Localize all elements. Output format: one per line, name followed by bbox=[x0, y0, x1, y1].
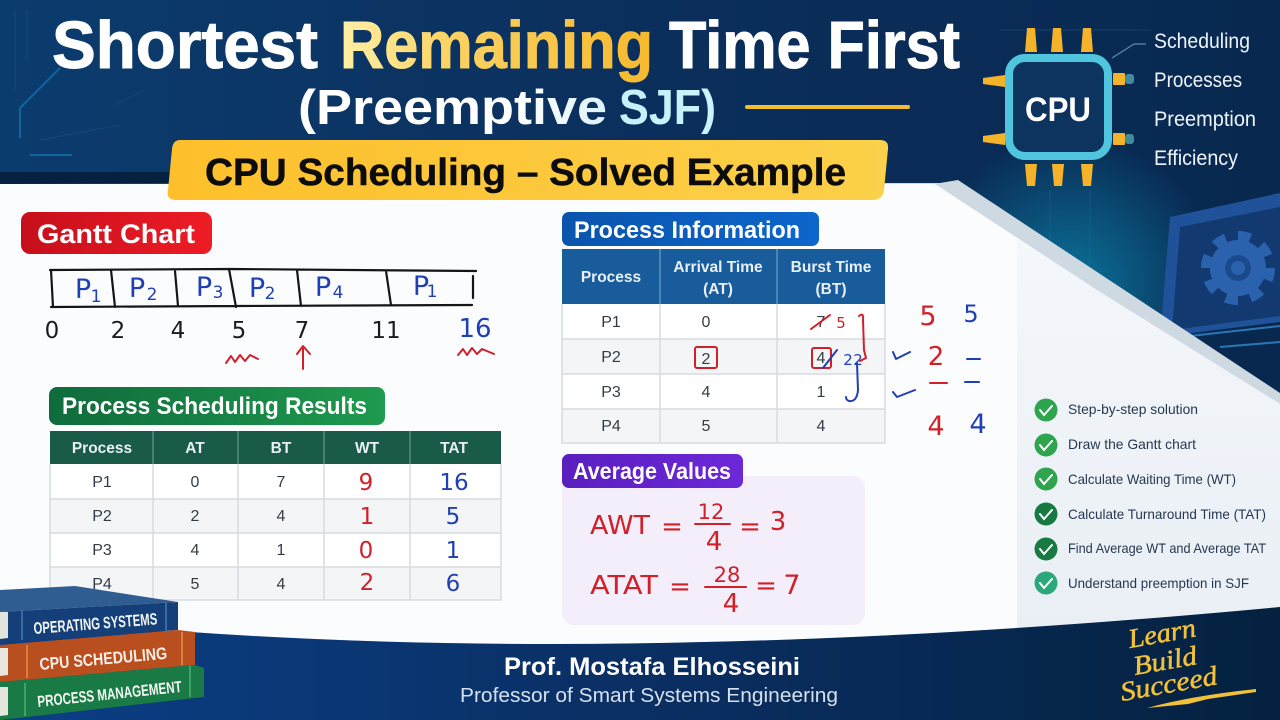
table: results: BT bbox=[271, 440, 292, 457]
formula: average waiting time: 4 bbox=[706, 527, 722, 557]
panel: Average Values bbox=[562, 454, 865, 625]
chart: hand-drawn Gantt bar: P bbox=[249, 273, 265, 304]
icon: CPU chip: CPU bbox=[1025, 91, 1091, 129]
table: process information bbox=[562, 249, 885, 443]
table: process information: P3 bbox=[601, 384, 621, 401]
chart: hand-drawn Gantt bar bbox=[45, 269, 494, 369]
motto: Learn Build Succeed: Learn bbox=[1125, 613, 1198, 654]
table: process information: P1 bbox=[601, 314, 621, 331]
book: Operating Systems: OPERATING SYSTEMS bbox=[33, 610, 158, 638]
title: (Preemptive bbox=[298, 81, 607, 135]
formula: average turnaround time bbox=[590, 563, 801, 619]
annotations: burst time working: 2 bbox=[843, 351, 853, 369]
annotations: burst time working: 5 bbox=[836, 314, 846, 332]
panel: Process Scheduling Results bbox=[49, 387, 501, 600]
motto: Learn Build Succeed: Succeed bbox=[1118, 660, 1220, 707]
table: results: TAT bbox=[440, 440, 468, 457]
chart: hand-drawn Gantt bar: 16 bbox=[458, 314, 492, 344]
table: results: 2 bbox=[191, 508, 200, 525]
table: process information: Arrival Time bbox=[673, 259, 763, 276]
chart: hand-drawn Gantt bar: 0 bbox=[45, 318, 59, 344]
table: results: P2 bbox=[92, 508, 112, 525]
chart: hand-drawn Gantt bar: P bbox=[315, 272, 331, 303]
table: process information: P4 bbox=[601, 418, 621, 435]
table: results: 16 bbox=[439, 470, 469, 496]
panel: white content area bbox=[0, 180, 1280, 647]
chart: hand-drawn Gantt bar: P bbox=[75, 274, 91, 305]
topic list: Processes bbox=[1154, 69, 1242, 92]
heading: Gantt Chart: Gantt Chart bbox=[37, 219, 195, 249]
annotations: burst time working: 4 bbox=[927, 411, 945, 442]
table: process information: 7 bbox=[817, 314, 826, 331]
subtitle banner: CPU Scheduling – Solved Example bbox=[205, 152, 846, 194]
table: results: Process bbox=[72, 440, 132, 457]
table: results: AT bbox=[185, 440, 205, 457]
formula: average waiting time: 12 bbox=[698, 500, 724, 524]
checklist: Understand preemption in SJF bbox=[1068, 575, 1249, 591]
chart: hand-drawn Gantt bar: 2 bbox=[265, 284, 275, 304]
formula: average turnaround time: 4 bbox=[723, 589, 739, 619]
presenter credit bbox=[460, 653, 838, 707]
table: process information: 2 bbox=[702, 351, 711, 368]
table: results: 2 bbox=[360, 570, 374, 596]
topic list: Efficiency bbox=[1154, 147, 1238, 170]
formula: average waiting time bbox=[590, 500, 786, 557]
heading: Gantt Chart bbox=[21, 212, 212, 254]
heading: Process Scheduling Results bbox=[49, 387, 385, 425]
chart: hand-drawn Gantt bar: P bbox=[413, 271, 429, 302]
table: results: 0 bbox=[191, 474, 200, 491]
checklist: Find Average WT and Average TAT bbox=[1068, 540, 1266, 556]
table: process information: Burst Time bbox=[791, 259, 872, 276]
illustration: stacked books bbox=[0, 586, 204, 720]
table: results: WT bbox=[355, 440, 380, 457]
illustration: laptop with gear bbox=[1160, 193, 1280, 347]
table: results: 7 bbox=[277, 474, 286, 491]
table: results: P4 bbox=[92, 576, 112, 593]
formula: average waiting time: AWT bbox=[590, 511, 650, 541]
table: results: P1 bbox=[92, 474, 112, 491]
table: process information: 4 bbox=[817, 418, 826, 435]
checklist bbox=[1034, 398, 1266, 594]
checklist: Calculate Waiting Time (WT) bbox=[1068, 471, 1236, 487]
table: process information: P2 bbox=[601, 349, 621, 366]
chart: hand-drawn Gantt bar: 2 bbox=[147, 285, 157, 305]
formula: average waiting time: 3 bbox=[770, 507, 786, 537]
chart: hand-drawn Gantt bar: P bbox=[196, 272, 212, 303]
table: process information: 4 bbox=[817, 350, 826, 367]
formula: average turnaround time: 7 bbox=[783, 570, 801, 601]
motto: Learn Build Succeed: Build bbox=[1131, 640, 1200, 681]
chart: hand-drawn Gantt bar: P bbox=[129, 273, 145, 304]
checklist: Step-by-step solution bbox=[1068, 401, 1198, 417]
table: process information: (BT) bbox=[816, 281, 846, 298]
chart: hand-drawn Gantt bar: 4 bbox=[171, 318, 185, 344]
table: results: 5 bbox=[191, 576, 200, 593]
book: CPU Scheduling bbox=[0, 630, 195, 682]
table: results: 1 bbox=[360, 504, 374, 530]
formula: average turnaround time: 28 bbox=[714, 563, 740, 587]
chart: hand-drawn Gantt bar: 1 bbox=[427, 282, 437, 302]
table: results: 6 bbox=[446, 571, 460, 597]
chart: hand-drawn Gantt bar: 2 bbox=[111, 318, 125, 344]
table: results: 1 bbox=[446, 538, 460, 564]
heading: Process Information: Process Information bbox=[574, 217, 800, 244]
title: Remaining bbox=[340, 8, 653, 83]
book: Operating Systems bbox=[0, 586, 178, 643]
title bbox=[52, 8, 960, 135]
title: Time First bbox=[669, 8, 960, 83]
footer band bbox=[0, 607, 1280, 720]
topic list bbox=[1112, 30, 1256, 170]
panel: Gantt chart bbox=[21, 212, 494, 369]
chart: hand-drawn Gantt bar: 11 bbox=[371, 318, 401, 344]
table: results: 0 bbox=[359, 538, 373, 564]
subtitle banner bbox=[168, 140, 888, 200]
table: process information: 0 bbox=[702, 314, 711, 331]
formula: average waiting time: = bbox=[661, 512, 683, 542]
table: results: 1 bbox=[277, 542, 286, 559]
formula: average waiting time: = bbox=[739, 512, 761, 542]
book: Process Management bbox=[0, 665, 204, 720]
title: Shortest bbox=[52, 8, 318, 83]
table: process information: 4 bbox=[702, 384, 711, 401]
book: Process Management: PROCESS MANAGEMENT bbox=[37, 679, 183, 711]
chart: hand-drawn Gantt bar: 7 bbox=[295, 318, 309, 344]
table: process information: (AT) bbox=[703, 281, 733, 298]
table: results: 4 bbox=[191, 542, 200, 559]
table: process information: 1 bbox=[817, 384, 826, 401]
checklist: Calculate Turnaround Time (TAT) bbox=[1068, 506, 1266, 522]
annotations: burst time working: 2 bbox=[853, 351, 863, 369]
heading: Process Scheduling Results: Process Scheduling Results bbox=[62, 393, 367, 420]
table: process information: Process bbox=[581, 269, 641, 286]
annotations: burst time working: 5 bbox=[919, 301, 937, 332]
title: SJF) bbox=[619, 81, 716, 135]
chart: hand-drawn Gantt bar: 3 bbox=[213, 283, 223, 303]
topic list: Scheduling bbox=[1154, 30, 1250, 53]
icon: CPU chip bbox=[983, 28, 1134, 186]
chart: hand-drawn Gantt bar: 4 bbox=[333, 283, 343, 303]
table: results: 5 bbox=[446, 504, 460, 530]
presenter credit: Prof. Mostafa Elhosseini bbox=[504, 653, 800, 681]
table: results bbox=[50, 431, 501, 600]
table: results: 4 bbox=[277, 576, 286, 593]
table: results: 4 bbox=[277, 508, 286, 525]
decorative gold rule bbox=[745, 105, 910, 109]
checklist: Draw the Gantt chart bbox=[1068, 436, 1196, 452]
heading: Average Values: Average Values bbox=[573, 458, 731, 484]
chart: hand-drawn Gantt bar: 5 bbox=[232, 318, 246, 344]
motto: Learn Build Succeed bbox=[1118, 613, 1256, 708]
annotations: burst time working: 5 bbox=[963, 300, 979, 328]
chart: hand-drawn Gantt bar: 1 bbox=[91, 287, 101, 307]
annotations: burst time working: 2 bbox=[928, 342, 944, 372]
panel: Process Information bbox=[562, 212, 987, 443]
book: CPU Scheduling: CPU SCHEDULING bbox=[39, 644, 168, 674]
table: process information: 5 bbox=[702, 418, 711, 435]
table: results: 9 bbox=[359, 470, 373, 496]
annotations: burst time working bbox=[695, 300, 987, 442]
annotations: burst time working: 4 bbox=[969, 409, 987, 440]
formula: average turnaround time: = bbox=[755, 571, 777, 601]
formula: average turnaround time: ATAT bbox=[590, 571, 658, 601]
topic list: Preemption bbox=[1154, 108, 1256, 131]
formula: average turnaround time: = bbox=[669, 572, 691, 602]
presenter credit: Professor of Smart Systems Engineering bbox=[460, 685, 838, 707]
table: results: P3 bbox=[92, 542, 112, 559]
